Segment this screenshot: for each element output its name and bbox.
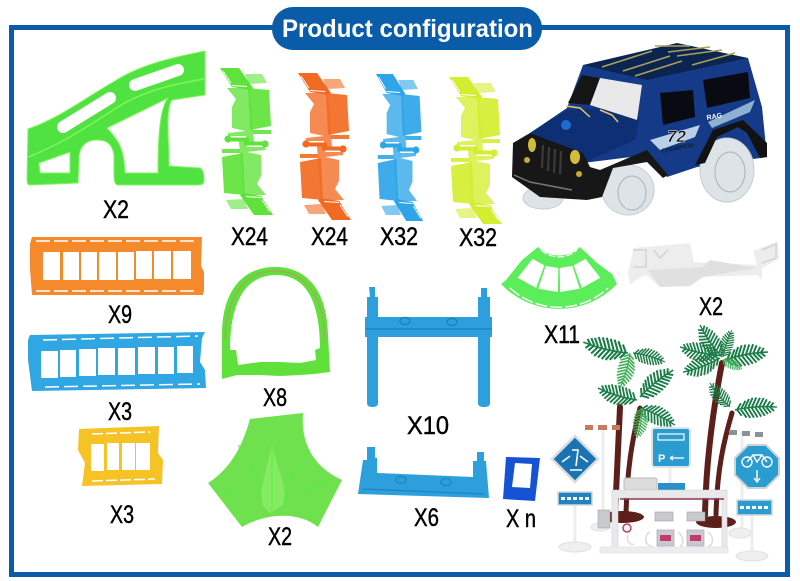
junction piece xyxy=(208,413,342,527)
car: 72 xyxy=(667,127,686,146)
car: RAG xyxy=(706,112,723,122)
road signs and station xyxy=(552,425,779,561)
blue connector block xyxy=(503,457,540,501)
title pill xyxy=(272,7,542,50)
yellow support clip xyxy=(449,77,502,224)
tall riser quantity: X10 xyxy=(407,412,449,440)
orange support clip xyxy=(298,73,351,220)
yellow clip quantity: X32 xyxy=(459,224,497,252)
street lamp left xyxy=(585,425,620,430)
station frame xyxy=(612,490,727,548)
green clip quantity: X24 xyxy=(231,223,268,251)
white clip quantity: X2 xyxy=(699,293,723,321)
green curved track xyxy=(501,247,617,309)
orange clip quantity: X24 xyxy=(311,223,348,251)
connector quantity: X n xyxy=(506,505,536,533)
bicycle octagon sign xyxy=(735,445,779,488)
arch quantity: X8 xyxy=(263,384,287,412)
car: CHAMPION xyxy=(661,143,694,155)
ramp piece xyxy=(27,51,205,185)
fenders and bumper xyxy=(695,120,767,165)
roof xyxy=(583,43,748,80)
curved track quantity: X11 xyxy=(544,321,580,349)
short blue riser xyxy=(358,447,489,498)
palm trees xyxy=(580,320,778,528)
tunnel arch xyxy=(222,267,330,379)
sign: pedestrian diamond xyxy=(552,436,598,482)
road signs and station: P xyxy=(658,453,665,465)
yellow ladder quantity: X3 xyxy=(110,501,134,529)
fronds xyxy=(580,320,778,432)
ramp quantity: X2 xyxy=(103,196,129,224)
poles and bases xyxy=(575,430,752,552)
parking sign xyxy=(652,428,690,467)
side graphics xyxy=(650,125,700,150)
white translucent clip xyxy=(628,241,779,287)
side windows xyxy=(660,90,695,125)
short riser quantity: X6 xyxy=(414,504,439,532)
car xyxy=(512,43,767,215)
title pill: Product configuration xyxy=(282,15,533,43)
body xyxy=(530,58,767,177)
orange ladder quantity: X9 xyxy=(108,301,132,329)
orange ladder track xyxy=(30,237,204,295)
sign: blue plate right xyxy=(737,500,772,515)
blue clip quantity: X32 xyxy=(380,223,418,251)
green support clip xyxy=(220,68,273,215)
trunks xyxy=(615,363,732,515)
yellow ladder track xyxy=(78,426,163,486)
small station signs xyxy=(624,478,657,490)
street lamp right xyxy=(729,430,763,437)
sign: blue plate left xyxy=(558,492,592,505)
windscreen xyxy=(568,75,600,105)
blue support clip xyxy=(376,74,423,221)
blue ladder quantity: X3 xyxy=(108,398,132,426)
blue ladder track xyxy=(28,332,206,391)
junction quantity: X2 xyxy=(268,523,292,551)
tall blue riser xyxy=(365,287,492,407)
pumps xyxy=(655,512,705,546)
bonnet marks xyxy=(566,106,618,122)
wheels xyxy=(523,138,754,215)
